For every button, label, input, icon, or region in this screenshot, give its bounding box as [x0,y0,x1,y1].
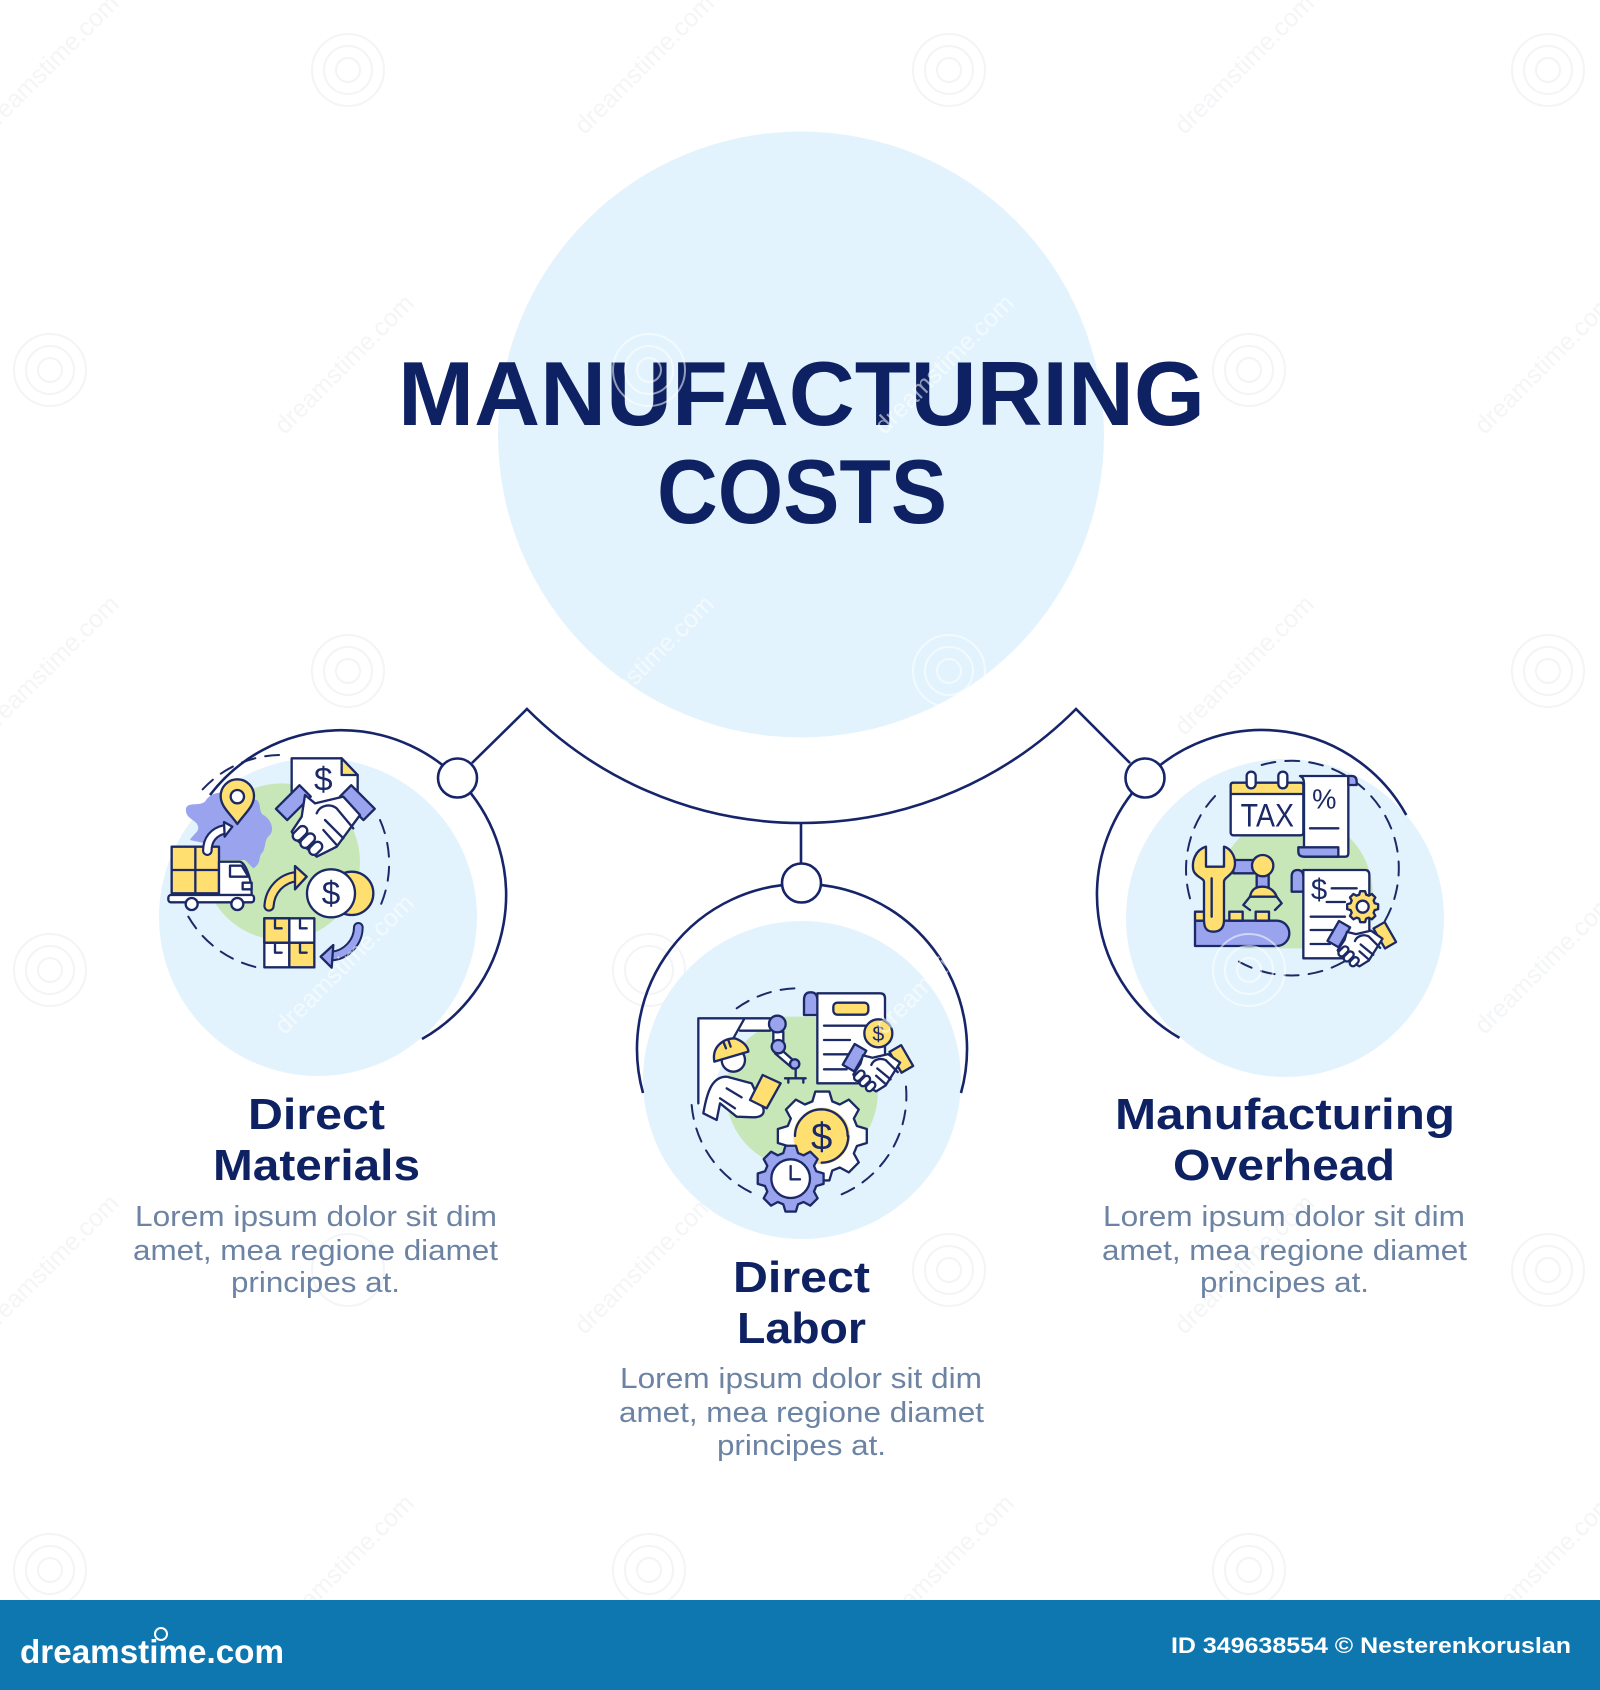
text: dreamstime.com [569,1189,720,1340]
heading: manufacturing overhead: Overhead [1173,1141,1395,1190]
footer bar [0,1600,1600,1690]
text: dreamstime.com [869,289,1020,440]
text: manufacturing overhead: principes at. [1200,1267,1369,1299]
text: dreamstime.com [269,889,420,1040]
text: direct labor: amet, mea regione diamet [619,1397,984,1429]
icon: manufacturing overhead [1186,761,1399,975]
title [398,344,1205,543]
icon: direct labor: $ [872,1022,884,1046]
light blue disc: manufacturing overhead [1126,759,1444,1077]
icon: manufacturing overhead: % [1312,783,1336,814]
central circle [498,132,1104,738]
heading: direct materials [213,1090,420,1190]
heading: direct labor: Direct [733,1253,870,1302]
panel: manufacturing overhead [1097,730,1467,1299]
connector lines [438,709,1164,902]
footer credit: ID 349638554 © Nesterenkoruslan [1171,1633,1571,1658]
title: COSTS [657,442,947,543]
text: direct labor: principes at. [717,1430,886,1462]
text: direct labor: Lorem ipsum dolor sit dim [620,1363,982,1395]
icon: manufacturing overhead: TAX [1241,798,1294,834]
icon: direct materials: $ [322,876,340,913]
footer logo: dreamstime.com [20,1633,284,1670]
text: direct materials [133,1201,498,1299]
heading: manufacturing overhead [1115,1090,1455,1190]
text: manufacturing overhead [1102,1201,1467,1299]
text: direct materials: amet, mea regione diamet [133,1235,498,1267]
text: direct labor [619,1363,984,1462]
heading: direct materials: Direct [248,1090,385,1139]
heading: direct labor [733,1253,870,1353]
title: MANUFACTURING [398,344,1205,445]
heading: manufacturing overhead: Manufacturing [1115,1090,1455,1139]
icon: direct materials [168,755,389,968]
text: dreamstime.com [869,889,1020,1040]
text: dreamstime.com [869,1489,1020,1640]
panel: direct materials [133,730,506,1299]
text: direct materials: principes at. [231,1267,400,1299]
ring: direct labor [637,884,967,1093]
text: manufacturing overhead: amet, mea regione diamet [1102,1235,1467,1267]
text: dreamstime.com [569,590,720,741]
ring: direct materials [210,730,506,1039]
heading: direct materials: Materials [213,1141,420,1190]
panel: direct labor [619,884,984,1462]
text: dreamstime.com [269,1489,420,1640]
icon: manufacturing overhead: $ [1311,873,1327,906]
light blue disc: direct labor [643,921,961,1239]
heading: direct labor: Labor [737,1304,866,1353]
text: dreamstime.com [1169,1189,1320,1340]
icon: direct labor: $ [811,1115,832,1158]
ring: manufacturing overhead [1097,730,1406,1038]
light blue disc: direct materials [159,758,477,1076]
icon: direct labor [692,988,913,1212]
text: manufacturing overhead: Lorem ipsum dolor sit dim [1103,1201,1465,1233]
icon: direct materials: $ [314,762,333,799]
text: dreamstime.com [1169,590,1320,741]
text: direct materials: Lorem ipsum dolor sit dim [135,1201,497,1233]
text: dreamstime.com [269,289,420,440]
